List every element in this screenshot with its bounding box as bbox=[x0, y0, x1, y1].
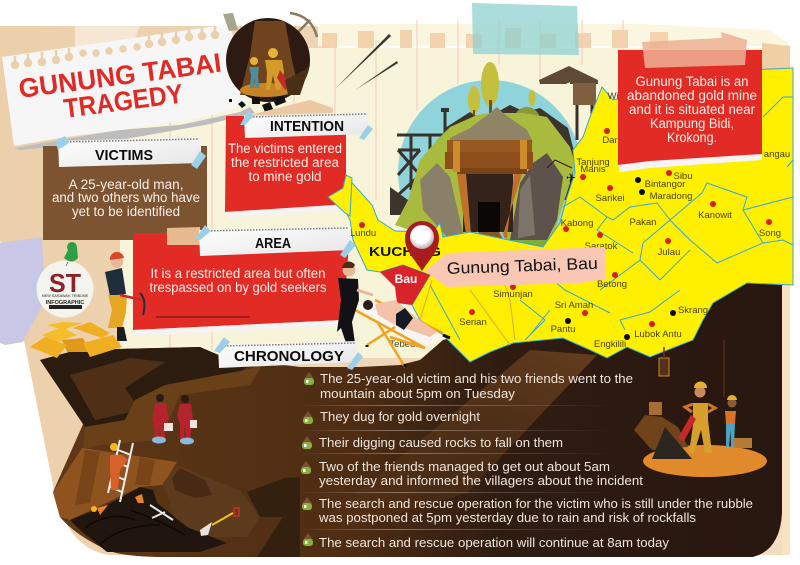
place names: Sibu bbox=[673, 171, 693, 182]
shovel bbox=[200, 508, 239, 536]
logo: ST infographic bbox=[36, 242, 94, 318]
text: intention: the restricted area bbox=[231, 155, 339, 170]
patient bbox=[375, 300, 437, 337]
item 6: The search and rescue operation will continue at 8am today bbox=[319, 535, 670, 550]
title paper bbox=[2, 24, 255, 150]
stretcher frame bbox=[355, 300, 443, 367]
item 2: They dug for gold overnight bbox=[320, 409, 480, 424]
mound bbox=[163, 465, 260, 537]
gold bars bbox=[30, 322, 122, 358]
rubble bbox=[70, 487, 227, 552]
icon: green pin bbox=[64, 242, 78, 266]
crate bbox=[734, 438, 752, 448]
light rays bbox=[300, 350, 597, 540]
text: intention: The victims entered bbox=[228, 141, 342, 156]
mine frame bbox=[445, 140, 533, 238]
place names: Maradong bbox=[650, 191, 692, 202]
Kuching label: KUCHING bbox=[369, 244, 441, 259]
tape corners bbox=[240, 111, 373, 140]
rock ledge bbox=[247, 477, 300, 557]
shaft wall bbox=[53, 448, 177, 520]
dark hills bbox=[445, 105, 575, 200]
ladder with rescuer bbox=[108, 440, 133, 502]
item 3: Their digging caused rocks to fall on them bbox=[319, 435, 563, 450]
place names: Manis bbox=[580, 164, 606, 175]
place names: Skrang bbox=[678, 305, 708, 316]
text: location note: and it is situated near bbox=[629, 102, 755, 117]
tape: teal bbox=[472, 3, 579, 55]
map tip over intention panel bbox=[328, 175, 352, 216]
text: location note: abandoned gold mine bbox=[627, 88, 757, 103]
icon: miners medallion bbox=[223, 13, 317, 112]
item 4 bbox=[301, 459, 643, 488]
rescuers bbox=[152, 394, 197, 444]
place names: Tebedu bbox=[389, 339, 421, 350]
panel: victims bbox=[43, 136, 207, 240]
location label: Gunung Tabai, Bau bbox=[447, 255, 598, 278]
mine illustration bbox=[390, 62, 598, 264]
map of Sarawak bbox=[328, 68, 793, 362]
place names: Bintangor bbox=[645, 179, 685, 190]
panel: area bbox=[133, 225, 356, 336]
item 1: The 25-year-old victim and his two friends went to the bbox=[320, 371, 633, 386]
place names: Pantu bbox=[551, 324, 575, 335]
place names: Sarikei bbox=[595, 193, 625, 204]
text: location note: Kampung Bidi, bbox=[650, 116, 734, 131]
logo: ST infographic: INFOGRAPHIC bbox=[46, 300, 84, 306]
rock fragments bbox=[229, 96, 286, 112]
chronology list bbox=[300, 371, 753, 550]
medic bbox=[337, 278, 359, 343]
miner small bbox=[725, 395, 737, 447]
panel: intention bbox=[225, 111, 373, 218]
text: location note bbox=[627, 74, 757, 145]
place names: angau bbox=[764, 149, 790, 160]
title: TRAGEDY bbox=[62, 79, 185, 124]
heading: chronology bbox=[214, 337, 363, 370]
barrel on rock bbox=[649, 402, 662, 415]
icon: airport plane: ✈ bbox=[566, 171, 576, 185]
item 5 bbox=[302, 496, 753, 525]
place names: Lubok Antu bbox=[634, 329, 682, 340]
place names: Simunjan bbox=[493, 289, 533, 300]
item 1 bbox=[304, 371, 633, 401]
grass bbox=[500, 240, 552, 252]
place markers bbox=[359, 128, 772, 327]
tape: lilac bbox=[0, 237, 45, 345]
tree line bbox=[547, 160, 572, 168]
heading: intention bbox=[244, 112, 368, 138]
trees bbox=[468, 62, 540, 133]
text: area: trespassed on by gold seekers bbox=[150, 280, 327, 295]
title: GUNUNG TABAI bbox=[17, 48, 223, 104]
place names: Wi bbox=[607, 91, 619, 102]
icon: location pin bbox=[405, 221, 439, 271]
place names: Kabong bbox=[561, 218, 593, 229]
Bau district bbox=[380, 265, 430, 305]
heading: chronology: CHRONOLOGY bbox=[234, 348, 344, 365]
trestle left bbox=[397, 110, 447, 195]
text: location note: Gunung Tabai is an bbox=[636, 74, 748, 89]
item 4: yesterday and informed the villagers about the incident bbox=[319, 473, 643, 488]
place names: Dar bbox=[602, 135, 618, 146]
tape: tan bbox=[167, 227, 200, 245]
item 5: was postponed at 5pm yesterday due to rain and risk of rockfalls bbox=[318, 510, 697, 525]
heading: area bbox=[199, 227, 351, 256]
place names: Lundu bbox=[350, 228, 376, 239]
stretcher mat bbox=[355, 300, 442, 347]
tape corners bbox=[55, 136, 206, 169]
heading: intention: INTENTION bbox=[270, 118, 344, 135]
rails bbox=[467, 232, 512, 252]
punch holes bbox=[12, 26, 218, 68]
logo: ST infographic: ST bbox=[49, 268, 81, 298]
place names: Engkilili bbox=[594, 339, 626, 350]
item 4: Two of the friends managed to get out about 5am bbox=[319, 459, 610, 474]
place names: Sri Aman bbox=[555, 300, 593, 311]
heading: victims: VICTIMS bbox=[95, 147, 153, 164]
hill bbox=[395, 107, 575, 240]
place names: Kanowit bbox=[698, 210, 732, 221]
victims on rubble bbox=[91, 494, 144, 515]
place names: Saratok bbox=[585, 241, 618, 252]
needle shards bbox=[335, 34, 398, 90]
text: victims: and two others who have bbox=[52, 190, 200, 205]
text: intention bbox=[228, 141, 342, 184]
location label bbox=[425, 247, 605, 287]
tape: tan bbox=[250, 100, 333, 118]
shovel bbox=[223, 13, 238, 31]
miner large bbox=[678, 382, 715, 453]
miners at work bbox=[634, 340, 767, 477]
item 5: The search and rescue operation for the victim who is still under the rubble bbox=[319, 496, 753, 511]
text: victims: A 25-year-old man, bbox=[68, 177, 184, 192]
tape: tan bbox=[642, 32, 747, 68]
lantern bbox=[659, 347, 669, 376]
place names: Betong bbox=[597, 279, 627, 290]
medic with stretcher bbox=[337, 262, 450, 367]
item 1: mountain about 5pm on Tuesday bbox=[320, 386, 516, 401]
dark upper chamber bbox=[40, 347, 247, 427]
miner with pickaxe bbox=[105, 252, 144, 341]
tape corners bbox=[195, 225, 356, 258]
watchtower bbox=[441, 108, 449, 112]
place names: Serian bbox=[459, 317, 487, 328]
place names: Tanjung bbox=[576, 157, 610, 168]
text: intention: to mine gold bbox=[248, 169, 322, 184]
text: area bbox=[150, 266, 327, 295]
place names: Pakan bbox=[630, 217, 656, 228]
heading: area: AREA bbox=[255, 235, 291, 252]
place names: Julau bbox=[658, 247, 680, 258]
sky circle bbox=[398, 80, 582, 264]
pickaxe bbox=[150, 505, 173, 520]
text: area: It is a restricted area but often bbox=[150, 266, 326, 281]
panel: location note bbox=[618, 32, 762, 172]
pickaxe bbox=[290, 13, 317, 37]
logo: ST infographic: NEW SARAWAK TRIBUNE bbox=[42, 294, 89, 298]
place names: Song bbox=[759, 228, 781, 239]
text: victims: yet to be identified bbox=[72, 204, 180, 219]
district boundaries bbox=[430, 97, 793, 340]
heading: victims bbox=[58, 137, 201, 167]
Bau text: Bau bbox=[395, 272, 417, 286]
water tower bbox=[539, 66, 598, 140]
text: victims bbox=[52, 177, 200, 219]
place names bbox=[350, 91, 790, 350]
text: location note: Krokong. bbox=[667, 130, 717, 145]
cave band bbox=[83, 365, 262, 450]
cave bbox=[40, 283, 782, 557]
